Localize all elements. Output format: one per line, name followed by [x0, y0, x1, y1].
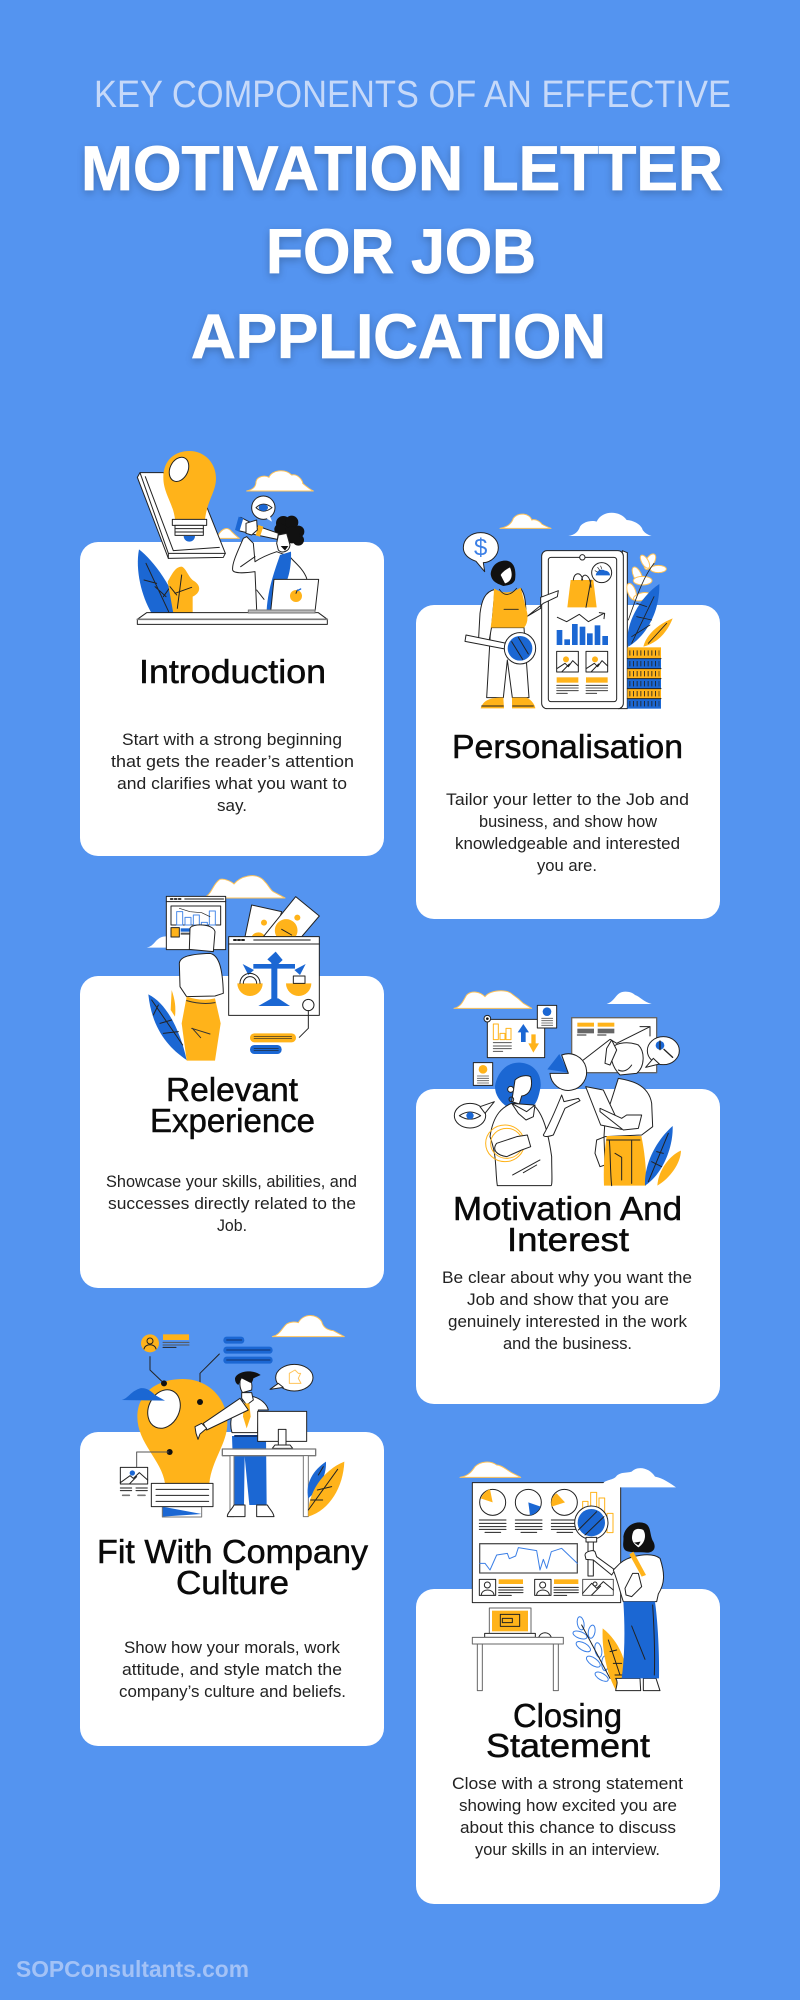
text: personalisation: business, and show how [479, 813, 657, 831]
text: motivation and interest: Be clear about why you want the [442, 1269, 692, 1287]
text: closing statement: your skills in an interview. [475, 1841, 660, 1859]
title block [81, 74, 731, 372]
heading: closing statement: Closing [513, 1697, 622, 1734]
illustration: man at desk with big bulb [120, 1316, 344, 1517]
text: closing statement [452, 1775, 683, 1859]
panel: motivation and interest [416, 1089, 720, 1404]
illustration: woman presenting dashboard [460, 1462, 676, 1691]
panel: fit with company culture [80, 1432, 384, 1746]
heading: relevant experience [150, 1071, 315, 1139]
heading: introduction: Introduction [139, 653, 326, 690]
panel: relevant experience [80, 976, 384, 1288]
main title: APPLICATION [191, 302, 606, 372]
illustration: woman with phone and shopping [463, 513, 673, 709]
text: introduction: say. [217, 797, 247, 815]
illustration: woman with balance scale [147, 876, 319, 1061]
text: fit with company culture: company’s culture and beliefs. [119, 1683, 346, 1701]
text: closing statement: about this chance to discuss [460, 1819, 676, 1837]
illustration: woman and man discussing charts [454, 991, 681, 1186]
panel: personalisation [416, 605, 720, 919]
text: introduction [111, 731, 354, 815]
main title [81, 134, 723, 372]
text: relevant experience: successes directly related to the [108, 1195, 356, 1213]
panel: closing statement [416, 1589, 720, 1904]
text: relevant experience: Showcase your skills, abilities, and [106, 1173, 357, 1191]
heading: relevant experience: Experience [150, 1102, 315, 1139]
text: closing statement: Close with a strong statement [452, 1775, 683, 1793]
text: fit with company culture: attitude, and style match the [122, 1661, 342, 1679]
heading: closing statement [486, 1697, 650, 1764]
heading: personalisation: Personalisation [452, 728, 683, 765]
heading: relevant experience: Relevant [166, 1071, 298, 1108]
footer website: SOPConsultants.com [16, 1956, 249, 1982]
subtitle: KEY COMPONENTS OF AN EFFECTIVE [94, 74, 731, 116]
text: motivation and interest: and the business. [503, 1335, 632, 1353]
text: motivation and interest: genuinely interested in the work [448, 1313, 688, 1331]
heading: motivation and interest: Motivation And [453, 1190, 682, 1227]
text: relevant experience: Job. [217, 1217, 247, 1235]
text: introduction: and clarifies what you want to [117, 775, 347, 793]
panel: introduction [80, 542, 384, 856]
illustration: light bulb and man with telescope [137, 451, 327, 624]
heading: fit with company culture: Culture [176, 1564, 289, 1601]
text: personalisation: Tailor your letter to the Job and [446, 791, 689, 809]
text: motivation and interest [442, 1269, 692, 1353]
text: fit with company culture [119, 1639, 346, 1701]
main title: MOTIVATION LETTER [81, 134, 723, 204]
text: personalisation: knowledgeable and interested [455, 835, 680, 853]
heading: closing statement: Statement [486, 1727, 650, 1764]
text: motivation and interest: Job and show that you are [467, 1291, 669, 1309]
text: fit with company culture: Show how your morals, work [124, 1639, 341, 1657]
main title: FOR JOB [266, 217, 536, 287]
illustration: woman with phone and shopping: $ [474, 535, 487, 562]
heading: motivation and interest [453, 1190, 682, 1258]
text: personalisation [446, 791, 689, 875]
text: introduction: Start with a strong beginning [122, 731, 342, 749]
heading: motivation and interest: Interest [507, 1221, 629, 1258]
text: personalisation: you are. [537, 857, 597, 875]
heading: fit with company culture [97, 1533, 369, 1601]
text: introduction: that gets the reader’s attention [111, 753, 354, 771]
text: relevant experience [106, 1173, 357, 1235]
text: closing statement: showing how excited you are [459, 1797, 677, 1815]
heading: fit with company culture: Fit With Company [97, 1533, 369, 1570]
